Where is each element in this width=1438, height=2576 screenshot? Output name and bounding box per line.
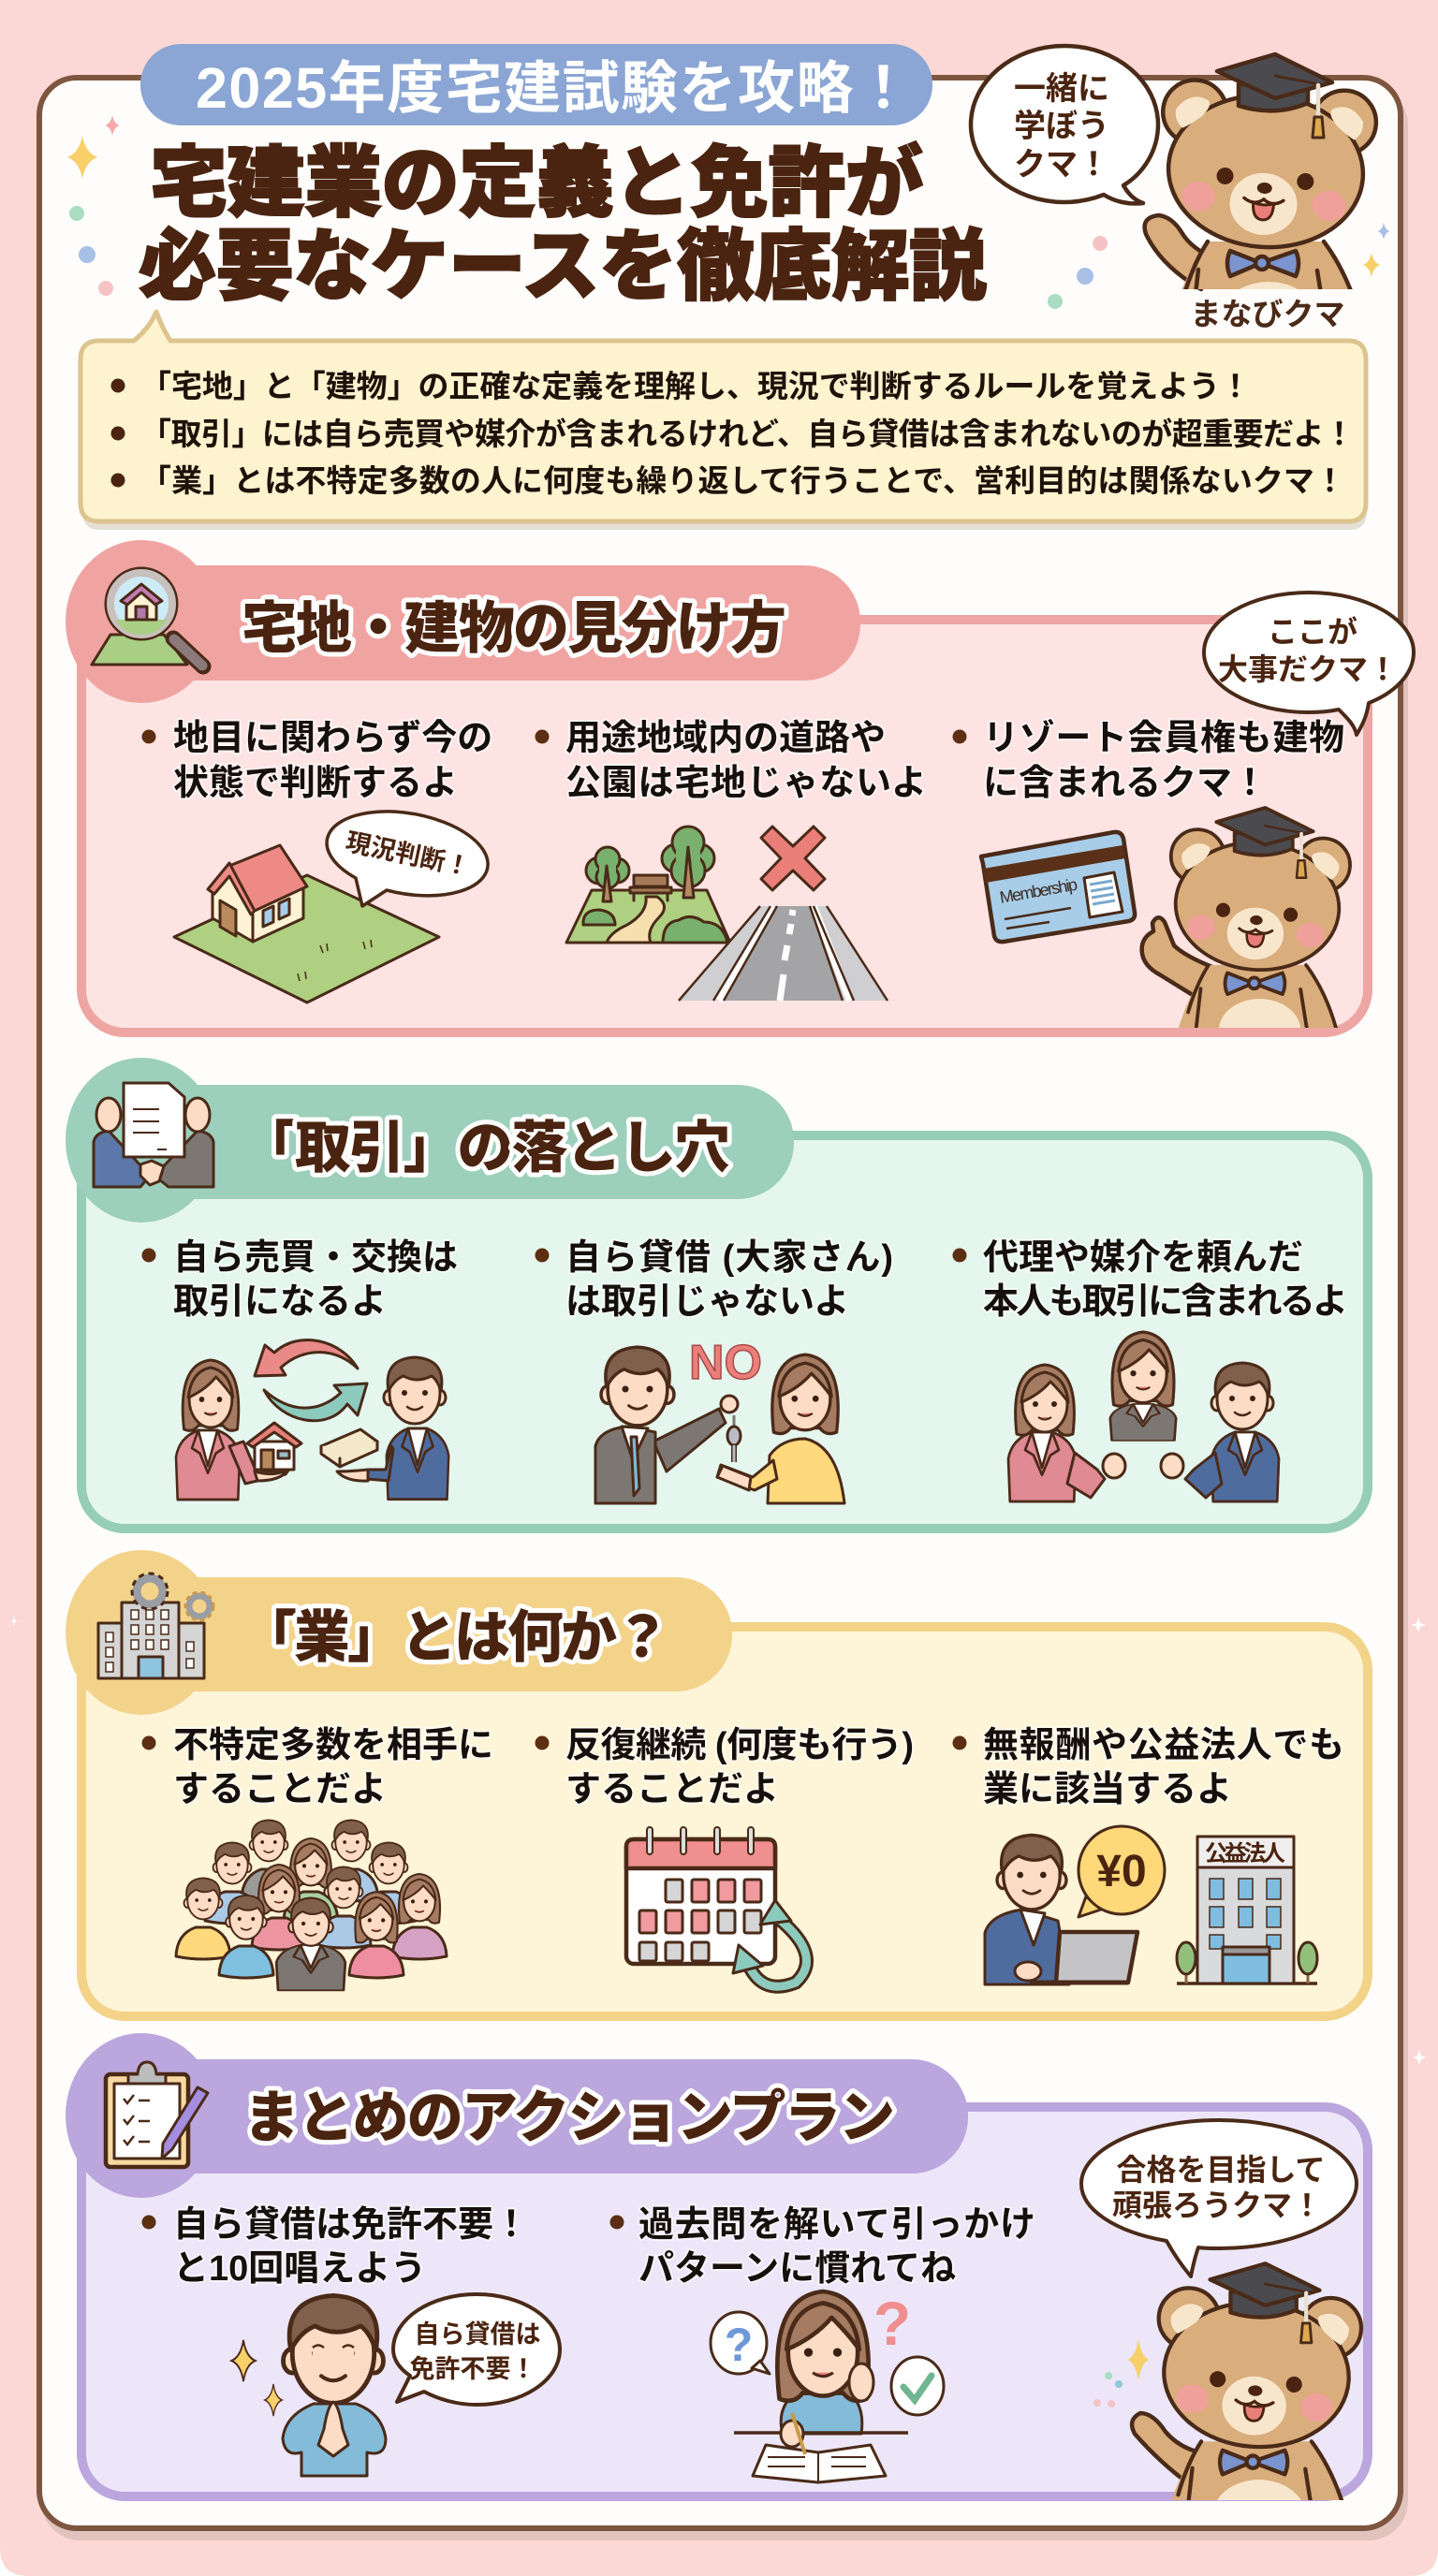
illustration: public interest corporation: 公益法人 — [1205, 1841, 1285, 1866]
text columns: 用途地域内の道路や — [565, 719, 886, 758]
panel: 業とは何か — [66, 1550, 1368, 2016]
illustration: buy and exchange — [176, 1339, 448, 1500]
callout: ここが大事だクマ: ここが — [1268, 615, 1357, 649]
panel: 取引の落とし穴 — [66, 1058, 1368, 1529]
text columns: 自ら売買・交換は — [173, 1238, 458, 1278]
illustration: road — [679, 906, 888, 1001]
text columns: リゾート会員権も建物 — [983, 719, 1344, 758]
summary bullets — [110, 378, 125, 487]
panel: まとめのアクションプラン — [66, 2033, 1368, 2551]
title: 必要なケースを徹底解説 — [139, 223, 987, 310]
text columns: 業に該当するよ — [983, 1770, 1232, 1809]
text columns — [173, 1238, 1348, 1322]
speech bubble: 一緒に学ぼうクマ: 学ぼう — [1014, 109, 1109, 144]
icon: office and gears — [98, 1573, 213, 1678]
illustration: calendar with repeat arrow — [626, 1830, 807, 1986]
illustration: studying girl — [711, 2289, 944, 2482]
illustration: membership card: Membership — [998, 875, 1078, 907]
illustration: agent and principal — [1008, 1332, 1279, 1501]
speech bubble: 一緒に学ぼうクマ: クマ！ — [1014, 147, 1109, 183]
text columns: 無報酬や公益法人でも — [983, 1726, 1344, 1765]
text columns: 不特定多数を相手に — [173, 1726, 493, 1765]
icon: cross mark — [761, 827, 825, 890]
heading: まとめのアクションプラン — [243, 2086, 895, 2149]
illustration: public interest corporation — [1177, 1837, 1317, 1983]
text columns: パターンに慣れてね — [638, 2249, 956, 2289]
bullets — [142, 730, 966, 743]
top ribbon: exam label: 2025年度宅建試験を攻略！ — [196, 56, 912, 120]
callout: ここが大事だクマ: 大事だクマ！ — [1218, 652, 1398, 686]
icon: magnifier over land — [92, 568, 203, 666]
text columns: することだよ — [173, 1770, 387, 1809]
mascot: まなびクマ: まなびクマ — [1191, 297, 1344, 331]
text columns: 地目に関わらず今の — [173, 719, 492, 758]
callout: 合格を目指して頑張ろうクマ — [1081, 2120, 1357, 2276]
summary text — [140, 369, 1355, 498]
speech bubble: 一緒に学ぼうクマ: 一緒に — [1014, 71, 1109, 107]
text columns: 代理や媒介を頼んだ — [983, 1238, 1303, 1278]
header decorations: sparkles and dots — [67, 115, 1389, 309]
title — [139, 139, 987, 310]
callout: 自ら貸借は免許不要: 免許不要！ — [410, 2355, 536, 2383]
title: 宅建業の定義と免許が — [150, 139, 923, 227]
text columns: 取引になるよ — [173, 1282, 387, 1322]
callout: 現況判断 — [327, 812, 488, 906]
icon: handshake and contract — [94, 1083, 213, 1187]
header tab — [66, 1550, 732, 1715]
text columns: 自ら貸借 (大家さん) — [565, 1238, 893, 1278]
mascot: まなびクマ — [1145, 54, 1378, 357]
text columns: に含まれるクマ！ — [983, 764, 1268, 803]
callout: 自ら貸借は免許不要 — [393, 2294, 560, 2405]
summary text: 「宅地」と「建物」の正確な定義を理解し、現況で判断するルールを覚えよう！ — [140, 369, 1251, 403]
text columns: は取引じゃないよ — [565, 1282, 849, 1322]
text columns: 本人も取引に含まれるよ — [983, 1282, 1348, 1322]
bullets — [142, 2215, 624, 2230]
illustration: crowd — [176, 1820, 447, 1990]
text columns: 過去問を解いて引っかけ — [638, 2205, 1035, 2245]
bullets — [142, 1735, 966, 1750]
illustration: praying boy — [231, 2295, 386, 2476]
callout: 現況判断: 現況判断！ — [344, 827, 473, 882]
text columns — [173, 1726, 1344, 1809]
illustration: park — [566, 827, 730, 943]
header tab — [66, 540, 860, 703]
callout: 合格を目指して頑張ろうクマ: 合格を目指して — [1116, 2153, 1326, 2187]
text columns: 自ら貸借は免許不要！ — [173, 2205, 529, 2245]
heading: 「業」とは何か？ — [241, 1606, 670, 1669]
arrow: red — [255, 1339, 358, 1376]
mascot: pointing bear — [1139, 806, 1352, 1028]
panel: 宅地・建物の見分け方 — [66, 540, 1414, 1061]
heading: 宅地・建物の見分け方 — [242, 597, 786, 660]
summary text: 「業」とは不特定多数の人に何度も繰り返して行うことで、営利目的は関係ないクマ！ — [140, 463, 1345, 498]
callout: 自ら貸借は免許不要: 自ら貸借は — [414, 2320, 541, 2349]
text columns — [173, 719, 1344, 803]
text columns: することだよ — [565, 1770, 779, 1809]
header tab — [66, 1058, 794, 1222]
illustration: landlord, NO: NO — [689, 1336, 762, 1390]
speech bubble: 一緒に学ぼうクマ — [971, 46, 1158, 204]
illustration: unpaid worker — [985, 1826, 1165, 1984]
heading: 「取引」の落とし穴 — [241, 1117, 730, 1179]
illustration: studying girl: ? — [725, 2319, 753, 2371]
mascot: waving bear — [1093, 2261, 1363, 2500]
illustration: house on land — [174, 845, 439, 1003]
text columns: 公園は宅地じゃないよ — [565, 764, 927, 803]
text columns: 反復継続 (何度も行う) — [565, 1726, 914, 1765]
illustration: membership card — [981, 832, 1135, 942]
arrow: teal — [264, 1383, 367, 1421]
callout: 合格を目指して頑張ろうクマ: 頑張ろうクマ！ — [1112, 2188, 1322, 2222]
bullets — [142, 1249, 966, 1262]
illustration: studying girl: ? — [873, 2289, 911, 2358]
text columns: と10回唱えよう — [173, 2249, 426, 2289]
illustration: unpaid worker: ¥0 — [1096, 1847, 1147, 1896]
illustration: landlord, NO — [595, 1336, 844, 1503]
header tab — [66, 2033, 968, 2198]
icon: clipboard and pen — [106, 2062, 208, 2167]
text columns: 状態で判断するよ — [173, 764, 458, 803]
summary callout — [81, 312, 1367, 530]
text columns — [173, 2205, 1035, 2289]
callout: ここが大事だクマ — [1204, 593, 1414, 735]
summary text: 「取引」には自ら売買や媒介が含まれるけれど、自ら貸借は含まれないのが超重要だよ！ — [140, 417, 1355, 451]
